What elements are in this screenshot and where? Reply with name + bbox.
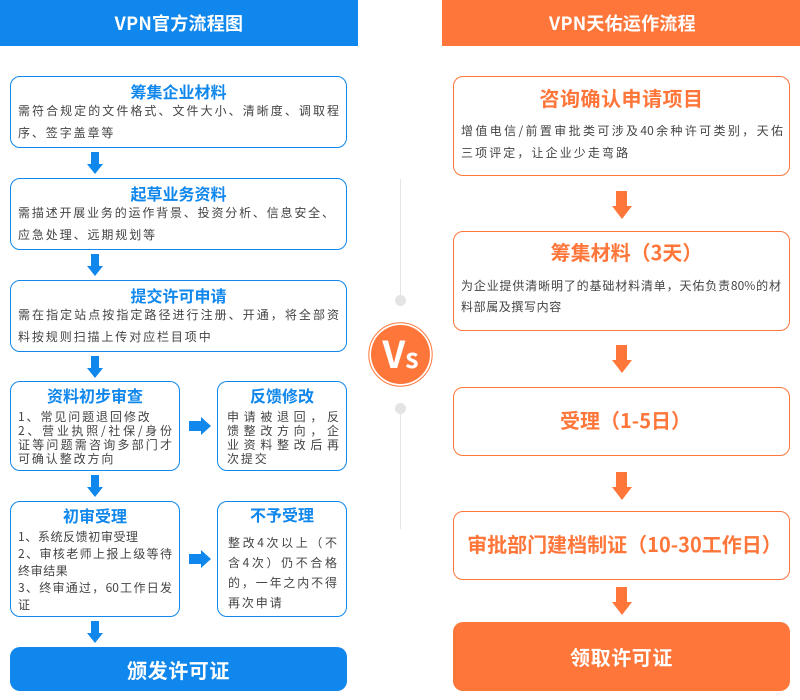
heading: 筹集企业材料 [130,79,226,103]
header: Tianyou VPN process [442,0,800,46]
panel: acceptance [453,387,790,456]
panel: feedback and correction [217,381,347,471]
text line 4: 次提交 [227,450,269,467]
text line 4: 再次申请 [228,594,284,611]
heading: 提交许可申请 [130,283,226,307]
text line 4: 可确认整改方向 [18,450,115,467]
arrow down 3 [87,356,103,378]
text line 1: 增值电信/前置审批类可涉及40余种许可类别，天佑 [461,122,783,139]
arrow down [612,587,632,615]
badge: Vs: Vs [381,325,419,379]
panel: gather materials 3 days [453,231,790,331]
panel: preliminary review [10,381,180,471]
arrow down 1 [87,152,103,174]
divider: upper line and dot [395,179,406,306]
button: receive licence [453,622,790,691]
text line 3: 业资料整改后再 [227,436,339,453]
header: Tianyou VPN process: VPN天佑运作流程 [549,10,696,36]
panel: gather company materials [10,76,347,148]
text line 1: 需符合规定的文件格式、文件大小、清晰度、调取程 [18,102,339,119]
heading: 反馈修改 [250,383,314,407]
text line 2: 馈整改方向，企 [227,422,339,439]
text line 2: 料部属及撰写内容 [461,298,562,315]
text line 1: 1、常见问题退回修改 [18,408,152,425]
panel: draft business materials [10,178,347,250]
text line 3: 终审结果 [18,562,68,579]
divider: lower line and dot [395,403,406,529]
text line 2: 三项评定，让企业少走弯路 [461,144,630,161]
text line 1: 需在指定站点按指定路径进行注册、开通，将全部资 [18,306,339,323]
heading: 不予受理 [250,502,314,526]
arrow down [612,191,632,219]
heading: 初审受理 [63,503,127,527]
heading: 受理（1-5日） [560,405,691,434]
arrow right 2 [189,550,211,568]
heading: 起草业务资料 [130,181,226,205]
text line 5: 证 [18,596,32,613]
button: issue licence: 颁发许可证 [127,655,230,684]
text line 4: 3、终审通过，60工作日发 [18,579,172,596]
button: receive licence: 领取许可证 [570,642,673,671]
badge: Vs [368,322,433,387]
text line 1: 1、系统反馈初审受理 [18,528,139,545]
text line 3: 的，一年之内不得 [228,574,337,591]
panel: submit licence application [10,280,347,352]
arrow down [612,345,632,373]
text line 2: 序、签字盖章等 [18,124,115,141]
text line 2: 2、营业执照/社保/身份 [18,422,172,439]
header: official VPN process: VPN官方流程图 [115,10,243,36]
arrow right 1 [189,417,211,435]
heading: 咨询确认申请项目 [540,83,704,112]
text line 2: 料按规则扫描上传对应栏目项中 [18,328,213,345]
panel: approval and licence preparation [453,511,790,580]
text line 1: 需描述开展业务的运作背景、投资分析、信息安全、 [18,204,334,221]
text line 1: 整改4次以上（不 [228,534,337,551]
panel: initial acceptance [10,501,180,617]
text line 3: 证等问题需咨询多部门才 [18,436,172,453]
arrow down 5 [87,621,103,643]
button: issue licence [10,647,347,691]
panel: consult and confirm [453,76,790,176]
header: official VPN process [0,0,358,46]
arrow down [612,472,632,500]
arrow down 2 [87,254,103,276]
arrow down 4 [87,475,103,497]
text line 1: 为企业提供清晰明了的基础材料清单，天佑负责80%的材 [461,277,781,294]
text line 2: 含4次）仍不合格 [228,554,337,571]
text line 1: 申请被退回，反 [227,408,339,425]
text line 2: 应急处理、远期规划等 [18,226,157,243]
heading: 资料初步审查 [47,383,143,407]
heading: 筹集材料（3天） [551,237,702,266]
heading: 审批部门建档制证（10-30工作日） [467,529,782,558]
text line 2: 2、审核老师上报上级等待 [18,545,172,562]
panel: application refused [217,501,347,617]
